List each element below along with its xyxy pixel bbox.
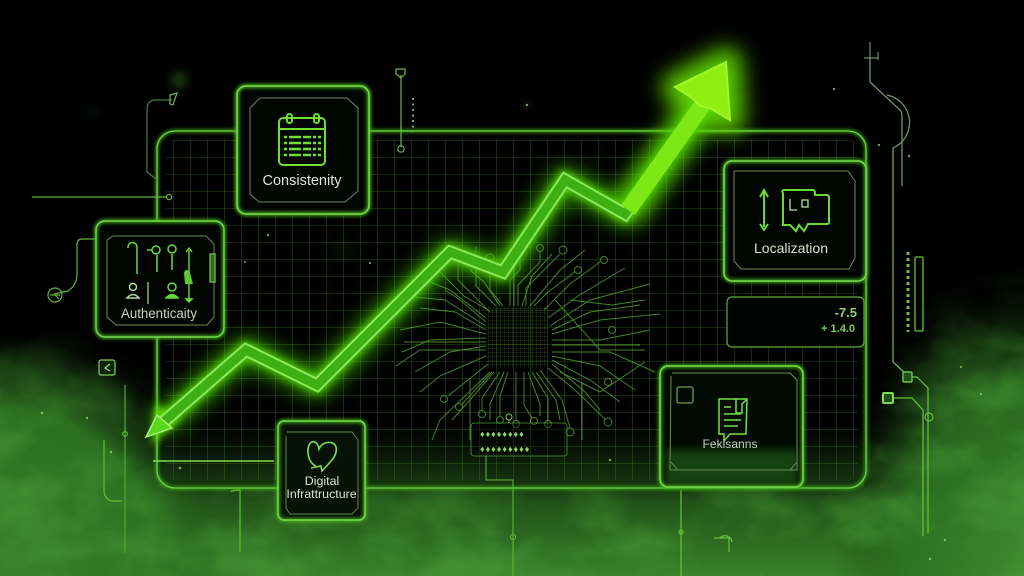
card: Consistency <box>237 86 369 214</box>
icon: document bubble <box>719 399 747 441</box>
smoke texture <box>0 278 1024 576</box>
arrow head <box>675 62 730 120</box>
growth arrow <box>146 62 730 437</box>
icon: corner badge <box>677 387 693 403</box>
icon: leaf heart <box>308 442 336 471</box>
icons: authenticity symbols <box>127 242 215 304</box>
card: Authenticity <box>96 221 224 337</box>
top connector <box>396 69 413 152</box>
value: -7.5: -7.5 <box>835 305 857 320</box>
label: Digital Infrattructure: Infrattructure <box>286 487 357 501</box>
small data readout <box>471 414 567 576</box>
label: Digital Infrattructure: Digital <box>305 474 339 488</box>
icon: calendar <box>279 114 325 165</box>
icon: arrows and speech bubble <box>760 190 829 231</box>
scattered particles <box>41 88 982 560</box>
label: Consistenity: Consistenity <box>262 173 342 189</box>
card: Feedback <box>660 366 803 487</box>
label: Authenticaity: Authenticaity <box>121 306 197 321</box>
value: +1.4.0: + 1.4.0 <box>821 323 855 335</box>
card: Digital Infrastructure <box>278 421 365 520</box>
left connector lines <box>32 93 274 553</box>
label: Localization: Localization <box>754 240 828 256</box>
side gauge <box>908 252 923 332</box>
data box <box>727 297 864 347</box>
card: Localization <box>724 161 866 281</box>
small data readout: ♦♦♦♦♦♦♦♦ <box>480 429 525 439</box>
panel: main dashboard <box>157 131 866 488</box>
label: Fekisanns: Fekisanns <box>702 437 758 451</box>
faint background blobs <box>59 71 530 431</box>
small data readout: ♦♦♦♦♦♦♦♦♦ <box>480 444 530 454</box>
right connector lines <box>679 42 933 576</box>
circuit board graphic <box>396 238 660 440</box>
arrow tail point <box>146 415 172 437</box>
